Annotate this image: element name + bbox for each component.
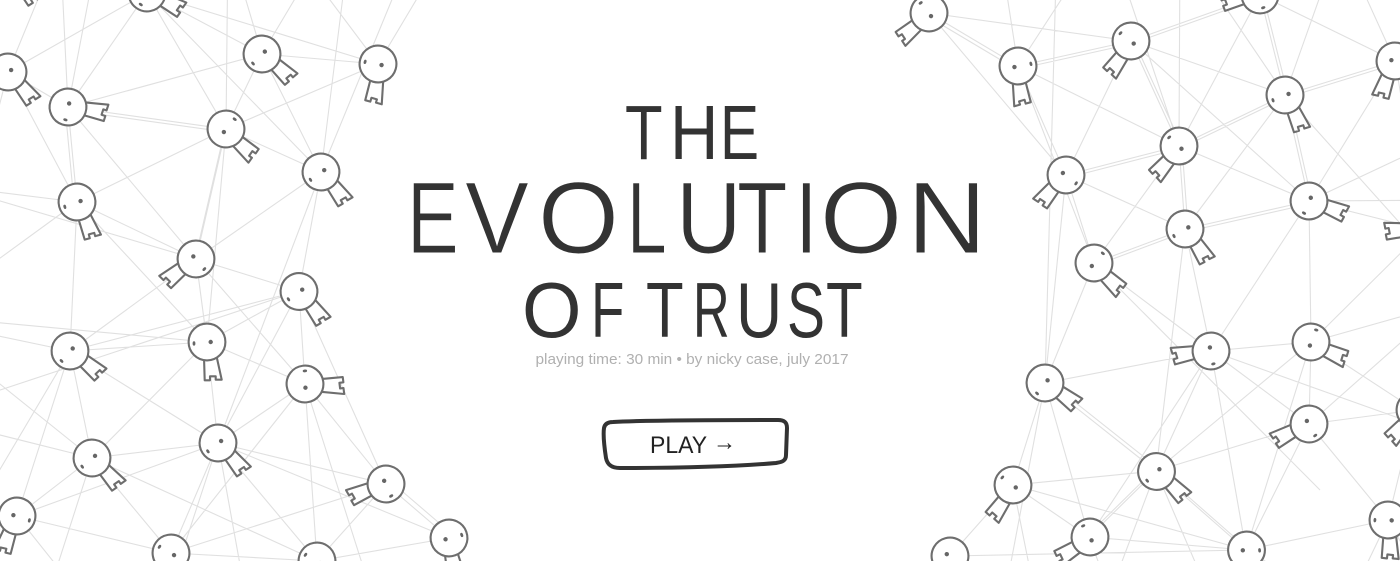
title line: EVOLUTION: T (737, 161, 788, 275)
title line: THE (625, 90, 759, 176)
title line: THE: T (625, 90, 662, 176)
subtitle: playing time: 30 min • by nicky case, july 2017 (536, 351, 848, 368)
character (280, 535, 343, 561)
title line: EVOLUTION: E (407, 161, 458, 275)
title (407, 90, 986, 354)
character (1169, 328, 1234, 380)
character (1284, 176, 1351, 236)
character (1030, 150, 1091, 217)
character (274, 266, 334, 334)
character (425, 514, 479, 561)
character (1019, 357, 1085, 423)
character (189, 324, 225, 380)
title line: OF TRUST: F (590, 266, 624, 354)
title line: OF TRUST: T (646, 266, 683, 354)
character (1218, 0, 1284, 26)
character (66, 432, 129, 500)
character (1131, 446, 1195, 513)
character (200, 103, 268, 166)
title line: EVOLUTION: O (820, 161, 902, 275)
title line: OF TRUST: R (693, 266, 729, 354)
title line: EVOLUTION: O (538, 161, 619, 275)
character (887, 0, 954, 49)
character (1383, 208, 1400, 255)
character (1068, 237, 1136, 300)
button label: PLAY (650, 432, 709, 459)
character (0, 494, 39, 557)
character (44, 325, 110, 392)
character (1262, 72, 1314, 137)
character (0, 47, 44, 114)
character (296, 147, 356, 214)
character (1267, 398, 1335, 461)
character (1048, 513, 1114, 561)
character (1160, 204, 1218, 271)
character (995, 43, 1046, 108)
title line: EVOLUTION: V (465, 161, 529, 275)
character (284, 361, 345, 405)
title line: OF TRUST: U (736, 266, 782, 354)
title line: OF TRUST (522, 266, 862, 354)
title line: THE: H (670, 90, 718, 176)
character (1227, 530, 1268, 561)
character (0, 0, 46, 14)
connection lines: right network (927, 0, 1400, 561)
title line: EVOLUTION (407, 161, 986, 275)
character (193, 418, 254, 485)
character (344, 459, 411, 519)
character (350, 41, 401, 106)
title line: EVOLUTION: L (627, 161, 667, 275)
character (1091, 15, 1157, 82)
character (1368, 39, 1400, 102)
button label: → (713, 429, 736, 456)
character (45, 84, 110, 136)
connection lines: left network (0, 0, 452, 561)
title line: EVOLUTION: U (676, 161, 742, 275)
character (1138, 120, 1205, 185)
character (1366, 500, 1400, 560)
character (1288, 319, 1353, 371)
character (121, 0, 189, 30)
title line: OF TRUST: O (522, 266, 582, 354)
play button (602, 418, 789, 470)
character (236, 28, 301, 95)
title line: EVOLUTION: N (907, 161, 986, 275)
title line: OF TRUST: S (787, 266, 825, 354)
character (1374, 384, 1400, 449)
character (974, 459, 1039, 526)
character (915, 531, 975, 561)
character (156, 233, 222, 299)
title line: OF TRUST: T (826, 266, 862, 354)
title line: THE: E (720, 90, 759, 176)
character (54, 179, 105, 244)
title line: EVOLUTION: I (795, 161, 818, 275)
character (134, 527, 197, 561)
button outline (604, 420, 787, 468)
